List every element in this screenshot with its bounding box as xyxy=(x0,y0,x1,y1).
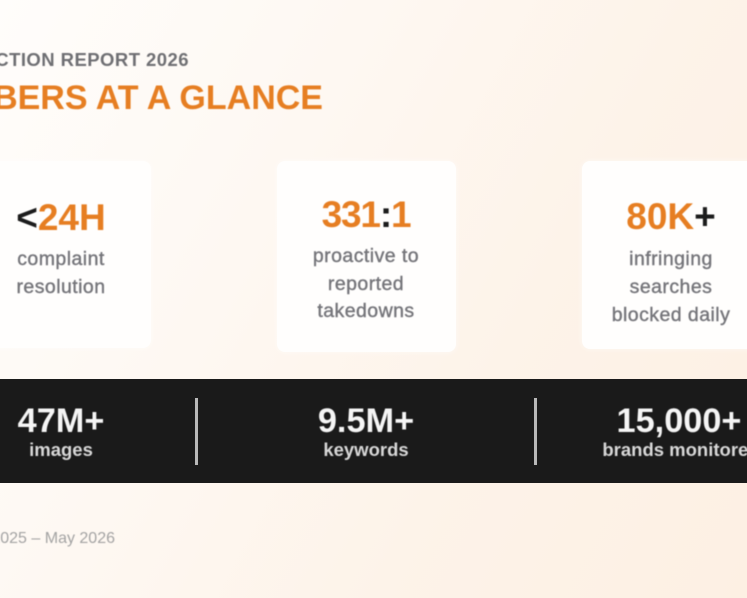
panel: proactive ratio card xyxy=(277,161,456,352)
label: complaint resolution: complaint xyxy=(17,248,105,270)
label: infringing searches blocked daily: blocked daily xyxy=(612,304,730,326)
label: proactive to reported takedowns: takedowns xyxy=(317,300,415,322)
stat: brands: 15,000+ xyxy=(617,402,741,440)
label: proactive to reported takedowns: proactive to xyxy=(313,245,419,267)
label: complaint resolution xyxy=(16,248,106,298)
label: infringing searches blocked daily xyxy=(612,248,730,326)
divider: first xyxy=(195,398,198,465)
label: infringing searches blocked daily: infringing xyxy=(629,248,713,270)
panel: blocked searches card xyxy=(582,161,747,349)
label: proactive to reported takedowns: reported xyxy=(328,272,404,294)
stat: 331 to 1: 331:1 xyxy=(322,194,410,235)
panel: dark statistics band xyxy=(0,379,747,483)
panel: complaint resolution card xyxy=(0,161,151,348)
label: infringing searches blocked daily: searches xyxy=(630,276,712,298)
label: proactive to reported takedowns xyxy=(313,245,419,322)
label: images: images xyxy=(29,439,93,460)
stat: images: 47M+ xyxy=(18,402,104,440)
label: complaint resolution: resolution xyxy=(16,276,106,298)
stat: 80K plus: 80K+ xyxy=(626,196,716,237)
divider: second xyxy=(534,398,537,465)
stat: keywords: 9.5M+ xyxy=(318,402,414,440)
stat: under 24 hours: <24H xyxy=(16,197,106,238)
label: keywords: keywords xyxy=(323,439,409,460)
